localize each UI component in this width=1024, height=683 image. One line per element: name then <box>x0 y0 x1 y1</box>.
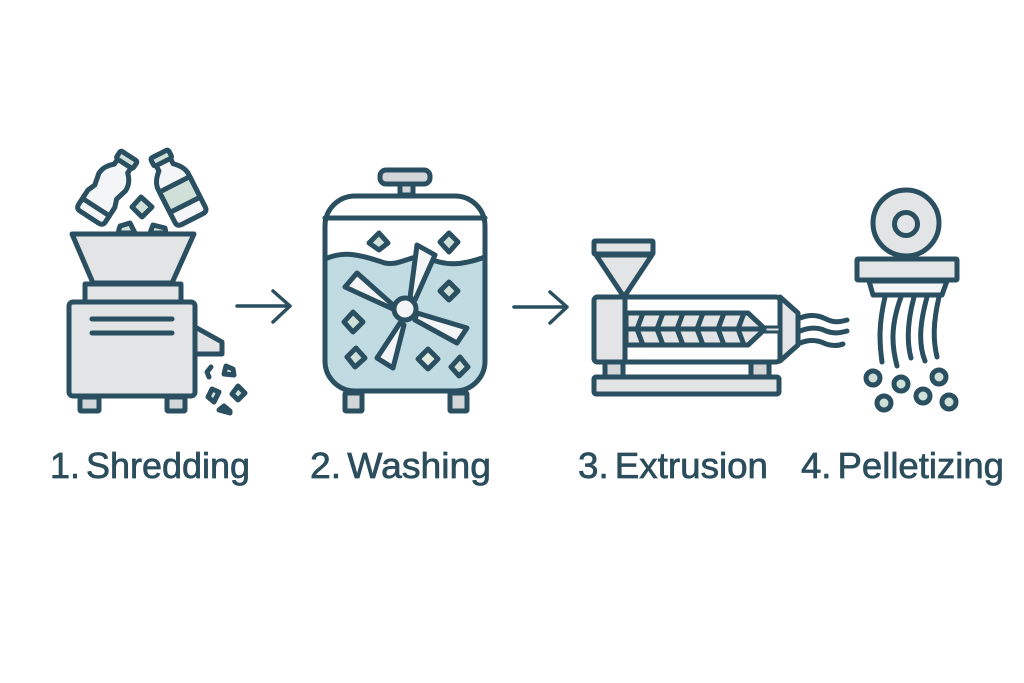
machine body <box>69 302 195 396</box>
impeller blades <box>345 245 467 368</box>
barrel <box>594 297 780 362</box>
flake entering hopper right <box>150 225 166 233</box>
feed block <box>594 297 625 362</box>
die head <box>869 281 947 295</box>
hopper neck <box>85 284 181 302</box>
label: step 4: 4. Pelletizing <box>801 445 1004 486</box>
impeller hub <box>394 298 416 320</box>
hopper top <box>594 241 653 254</box>
floating flakes <box>344 233 468 376</box>
knob <box>380 170 430 184</box>
shredded flakes <box>207 366 245 413</box>
output spout <box>195 327 222 354</box>
lid line <box>325 216 485 220</box>
tank outline <box>325 196 485 391</box>
label: step 3: 3. Extrusion <box>578 445 768 486</box>
flakes entering hopper <box>118 223 135 233</box>
feet <box>80 397 185 411</box>
arrow 1 <box>237 291 290 322</box>
die plate <box>857 259 957 280</box>
icon: shredder <box>69 146 245 413</box>
screw flights <box>626 313 765 345</box>
control slots <box>92 319 172 333</box>
strands <box>880 297 939 366</box>
knob stem <box>400 184 413 195</box>
icon: pelletizer <box>857 190 957 410</box>
water <box>325 254 485 391</box>
left plastic bottle <box>76 147 143 226</box>
icon: extruder <box>594 241 847 394</box>
icon: washing tank <box>324 170 486 411</box>
hopper <box>72 234 194 283</box>
legs <box>605 362 769 377</box>
wheel hub <box>894 212 918 236</box>
water surface <box>325 254 485 264</box>
base <box>594 377 779 394</box>
extruded strands <box>800 315 847 346</box>
right plastic bottle <box>144 146 207 227</box>
die head <box>780 297 798 361</box>
label: step 2: 2. Washing <box>310 445 491 486</box>
label: step 1: 1. Shredding <box>50 445 250 486</box>
arrow 2 <box>514 292 567 323</box>
feet <box>345 393 467 411</box>
screw <box>626 313 765 345</box>
pellets <box>866 370 956 410</box>
cutting wheel <box>873 190 939 256</box>
nozzle <box>765 327 780 332</box>
falling flake <box>132 197 152 217</box>
tank shell <box>324 195 486 392</box>
hopper funnel <box>596 255 652 297</box>
